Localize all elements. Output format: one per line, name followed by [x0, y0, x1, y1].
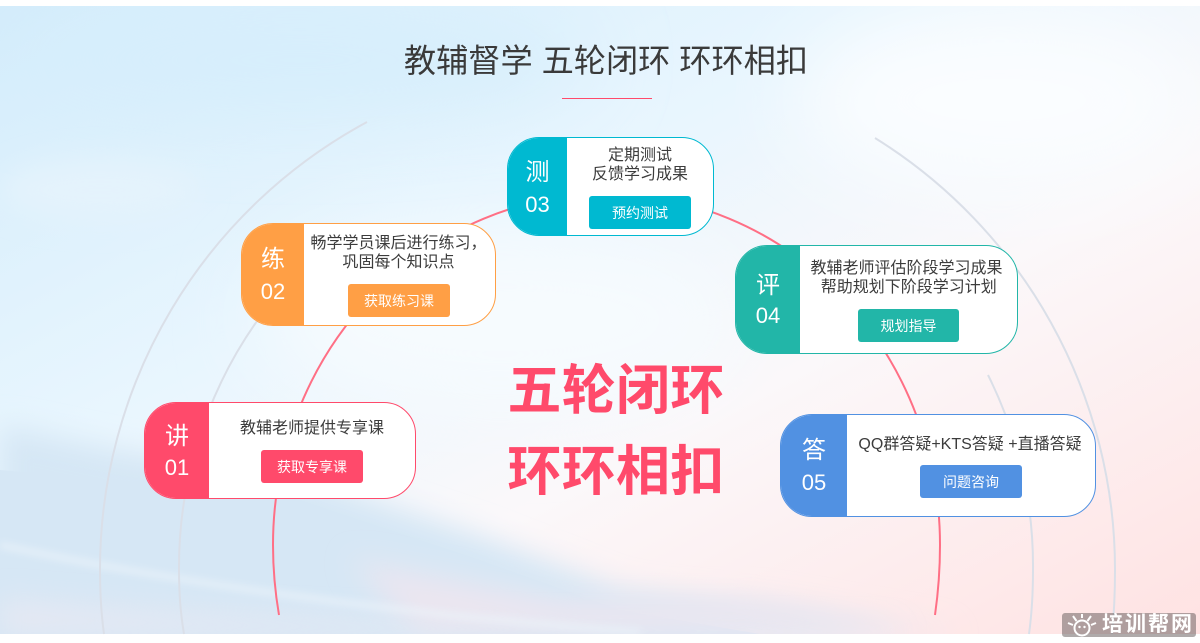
- card 01 description: 教辅老师提供专享课: [240, 420, 384, 437]
- card 03: test: [507, 137, 714, 236]
- icon: sun face: [1068, 614, 1096, 636]
- watermark: [1062, 613, 1196, 637]
- card 05 side label: 05: [802, 470, 826, 495]
- title underline: [562, 98, 652, 99]
- card 04 side label: 04: [756, 303, 780, 328]
- card 01 side label: 讲: [165, 423, 189, 450]
- card 02 button: [348, 284, 450, 317]
- card 03 button: [589, 196, 691, 229]
- card 02 description: [310, 234, 486, 271]
- card 04 description: 帮助规划下阶段学习计划: [821, 279, 997, 296]
- center slogan: 环环相扣: [507, 442, 725, 502]
- card 05 button: [920, 465, 1022, 498]
- card 02 side label: 02: [261, 279, 285, 304]
- card 04 description: [810, 259, 1002, 296]
- card 05 button: 问题咨询: [943, 474, 999, 490]
- card 01 button: 获取专享课: [277, 459, 347, 475]
- card 04 side label: [736, 246, 800, 353]
- card 02 description: 巩固每个知识点: [342, 254, 454, 271]
- card 05 side label: [781, 415, 847, 516]
- card 05: answer: [780, 414, 1096, 517]
- card 03 side label: 03: [525, 192, 550, 217]
- card 02 button: 获取练习课: [364, 293, 434, 309]
- card 04 description: 教辅老师评估阶段学习成果: [810, 260, 1002, 277]
- card 02: practice: [241, 223, 496, 326]
- card 03 side label: 测: [526, 159, 550, 186]
- card 01: lecture: [144, 402, 416, 499]
- card 03 side label: [508, 138, 567, 235]
- watermark text: 培训帮网: [1102, 613, 1194, 636]
- center slogan: [507, 361, 725, 502]
- card 02 side label: [242, 224, 304, 325]
- card 02 description: 畅学学员课后进行练习，: [310, 235, 486, 252]
- card 03 description: [592, 146, 688, 183]
- card 04 button: 规划指导: [880, 318, 936, 334]
- card 01 side label: 01: [165, 455, 189, 480]
- card 03 description: 反馈学习成果: [592, 166, 688, 183]
- title: 教辅督学 五轮闭环 环环相扣: [404, 43, 808, 79]
- card 04 side label: 评: [756, 272, 780, 299]
- card 03 description: 定期测试: [608, 147, 672, 164]
- card 01 side label: [145, 403, 209, 498]
- card 01 button: [261, 450, 363, 483]
- card 05 description: QQ群答疑+KTS答疑 +直播答疑: [858, 436, 1082, 453]
- card 05 side label: 答: [802, 437, 826, 464]
- card 04 button: [858, 309, 959, 342]
- card 02 side label: 练: [261, 246, 285, 273]
- card 03 button: 预约测试: [612, 205, 668, 221]
- card 04: review: [735, 245, 1018, 354]
- center slogan: 五轮闭环: [507, 361, 725, 421]
